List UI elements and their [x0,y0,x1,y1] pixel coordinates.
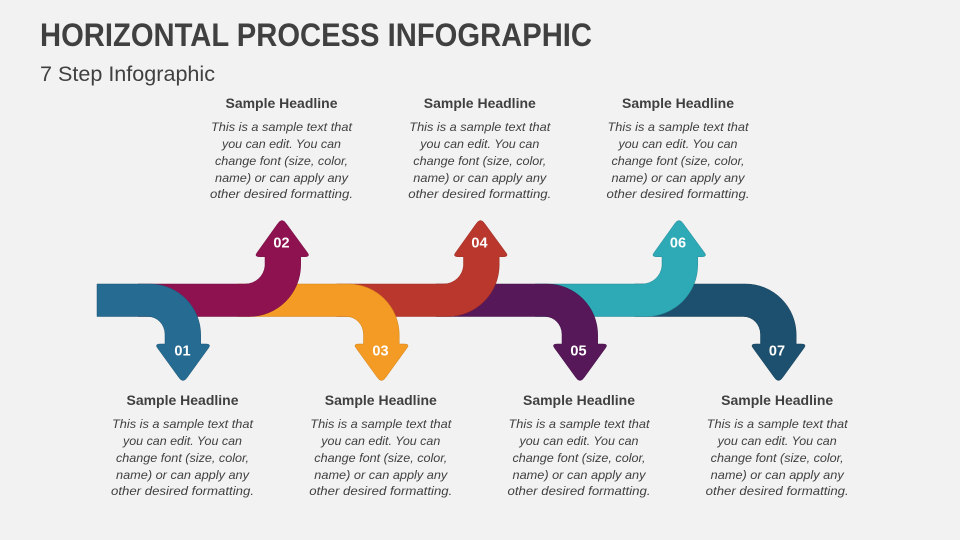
step numbers: 01 [174,344,191,360]
arrow 07 [634,284,805,380]
title: HORIZONTAL PROCESS INFOGRAPHIC [40,17,592,53]
arrow 04 [336,220,507,317]
arrow 02 [138,220,309,317]
text block 05: Sample Headline [523,393,636,408]
text block 01: This is a sample text that [112,417,254,431]
text block 01: other desired formatting. [111,484,254,498]
text block 04: Sample Headline [424,96,536,111]
text block 06 [606,96,750,201]
arrow 06 [535,220,706,317]
text block 07: change font (size, color, [711,451,844,465]
text block 07: other desired formatting. [706,484,849,498]
text block 05 [508,393,650,498]
text block 03 [309,393,452,498]
step numbers: 02 [273,236,290,252]
text block 05: change font (size, color, [512,451,646,465]
text block 06: you can edit. You can [617,137,738,151]
text block 05: other desired formatting. [508,484,650,498]
text block 05: name) or can apply any [512,468,647,482]
text block 01 [111,393,254,498]
arrow 03 [238,284,408,380]
text block 01: Sample Headline [126,393,239,408]
step numbers [174,236,785,360]
text block 02: name) or can apply any [215,171,349,185]
text block 06: name) or can apply any [612,171,746,185]
text block 01: you can edit. You can [122,434,242,448]
text block 07: you can edit. You can [717,434,837,448]
text block 07: name) or can apply any [711,468,845,482]
text block 06: other desired formatting. [606,187,750,201]
step numbers: 06 [670,236,686,252]
step numbers: 04 [471,236,488,252]
text block 04: other desired formatting. [408,187,551,201]
step numbers: 07 [769,344,785,360]
text block 05: you can edit. You can [518,434,639,448]
text block 06: Sample Headline [622,96,735,111]
text block 03: This is a sample text that [310,417,452,431]
step numbers: 05 [570,344,587,360]
step numbers: 03 [372,344,389,360]
text block 02: Sample Headline [226,96,338,111]
text block 02: other desired formatting. [210,187,353,201]
text block 06: This is a sample text that [608,120,749,134]
text block 04 [408,96,551,201]
text block 04: change font (size, color, [413,154,546,168]
text block 06: change font (size, color, [612,154,744,168]
text block 03: change font (size, color, [314,451,447,465]
text block 07: Sample Headline [721,393,834,408]
text block 04: you can edit. You can [419,137,540,151]
text block 01: name) or can apply any [116,468,250,482]
text block 03: Sample Headline [325,393,437,408]
text block 02 [210,96,353,201]
text block 02: This is a sample text that [211,120,353,134]
text block 07 [706,393,849,498]
text block 04: This is a sample text that [409,120,551,134]
text block 03: you can edit. You can [320,434,441,448]
subtitle: 7 Step Infographic [40,62,215,86]
arrow 05 [436,284,607,380]
text block 02: you can edit. You can [221,137,341,151]
text block 05: This is a sample text that [508,417,650,431]
text block 03: other desired formatting. [309,484,452,498]
text block 07: This is a sample text that [707,417,848,431]
text block 02: change font (size, color, [215,154,348,168]
text block 03: name) or can apply any [314,468,448,482]
arrow 01 [97,284,210,380]
text block 01: change font (size, color, [116,451,249,465]
text block 04: name) or can apply any [413,171,547,185]
